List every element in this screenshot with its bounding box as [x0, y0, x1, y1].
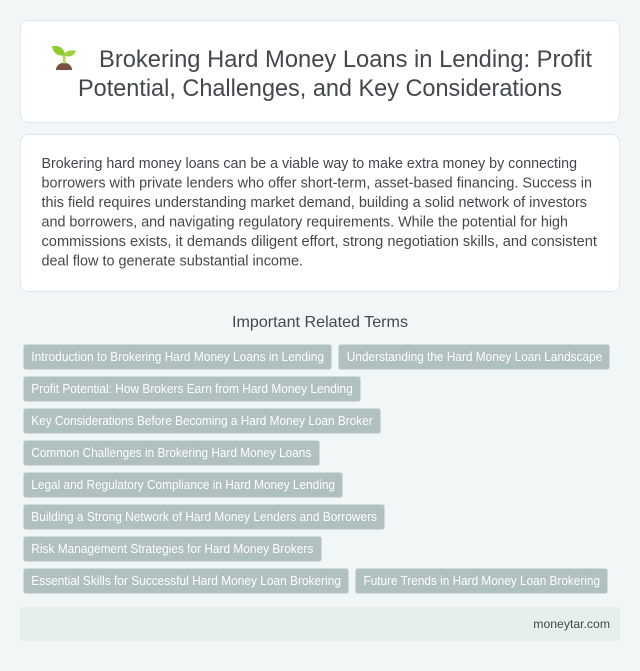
body paragraph: borrowers with private lenders who offer short-term, asset-based financing. Success in: [42, 176, 592, 192]
related terms tags: [24, 344, 610, 594]
tag: Essential Skills for Successful Hard Money Loan Brokering: [31, 574, 341, 588]
body paragraph: Brokering hard money loans can be a viable way to make extra money by connecting: [42, 156, 577, 172]
tag: Understanding the Hard Money Loan Landscape: [347, 350, 602, 364]
panel: introduction: [20, 134, 620, 292]
tag: Profit Potential: How Brokers Earn from Hard Money Lending: [31, 382, 353, 396]
tag: [24, 344, 332, 370]
footer source: moneytar.com: [533, 617, 610, 631]
tag: Legal and Regulatory Compliance in Hard Money Lending: [31, 478, 335, 492]
tag: Building a Strong Network of Hard Money Lenders and Borrowers: [31, 510, 377, 524]
tag: [24, 536, 322, 562]
footer: [20, 607, 620, 641]
body paragraph: this field requires understanding market demand, building a solid network of investors: [42, 195, 587, 211]
tag: [24, 504, 384, 530]
tag: Future Trends in Hard Money Loan Brokering: [364, 574, 600, 588]
title text: Brokering Hard Money Loans in Lending: Profit: [99, 46, 592, 73]
body paragraph: and borrowers, and navigating regulatory requirements. While the potential for high: [42, 214, 568, 230]
tag: [24, 472, 342, 498]
tag: Common Challenges in Brokering Hard Money Loans: [31, 446, 311, 460]
tag: [24, 568, 348, 594]
tag: [338, 344, 610, 370]
body paragraph: [42, 156, 597, 270]
body paragraph: deal flow to generate substantial income.: [42, 254, 303, 270]
tag: Introduction to Brokering Hard Money Loans in Lending: [31, 350, 324, 364]
panel: title: [20, 20, 620, 122]
title text: [78, 46, 592, 102]
body paragraph: commissions exists, it demands diligent effort, strong negotiation skills, and consistent: [42, 234, 597, 250]
heading: related terms: Important Related Terms: [232, 314, 408, 331]
tag: [356, 568, 608, 594]
tag: Risk Management Strategies for Hard Money Brokers: [31, 542, 313, 556]
tag: [24, 440, 320, 466]
icon: seedling: [52, 46, 76, 70]
tag: Key Considerations Before Becoming a Hard Money Loan Broker: [31, 414, 373, 428]
tag: [24, 408, 380, 434]
title text: Potential, Challenges, and Key Considerations: [78, 75, 562, 102]
tag: [24, 376, 360, 402]
